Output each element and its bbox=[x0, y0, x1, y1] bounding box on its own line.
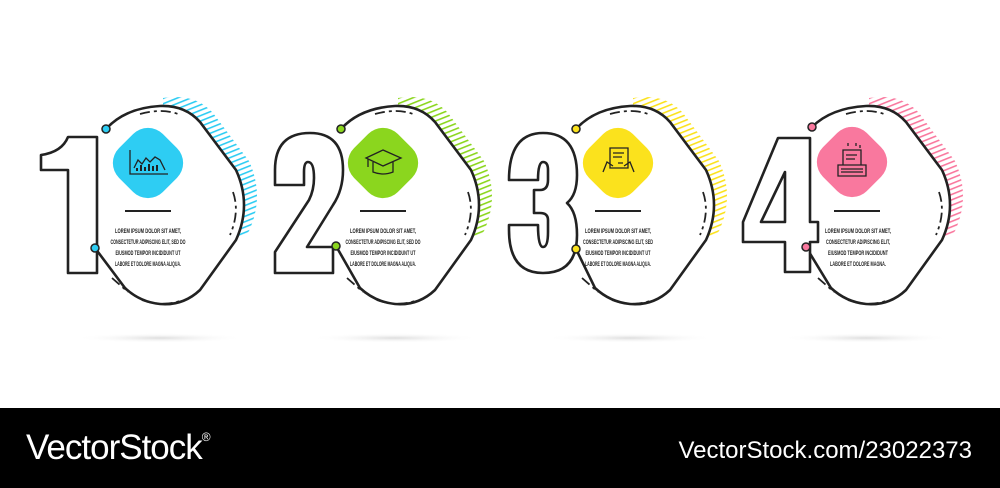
text block 1: LOREM IPSUM DOLOR SIT AMET, bbox=[115, 228, 181, 235]
text block 4: EIUSMOD TEMPOR INCIDIDUNT bbox=[828, 250, 888, 257]
text block 3: LABORE ET DOLORE MAGNA ALIQUA. bbox=[585, 261, 651, 268]
panel 3 bbox=[509, 97, 727, 343]
digit 1 bbox=[41, 137, 97, 273]
text block 1 bbox=[110, 228, 186, 268]
text block 2: LOREM IPSUM DOLOR SIT AMET, bbox=[350, 228, 416, 235]
icon: document in hands bbox=[574, 119, 662, 207]
panel 2 bbox=[275, 97, 492, 343]
text block 2 bbox=[346, 228, 421, 268]
text block 3 bbox=[583, 228, 653, 268]
text block 2: CONSECTETUR ADIPISCING ELIT, SED DO bbox=[346, 239, 421, 246]
text block 1: EIUSMOD TEMPOR INCIDIDUNT UT bbox=[116, 250, 181, 257]
text block 1: CONSECTETUR ADIPISCING ELIT, SED DO bbox=[110, 239, 186, 246]
digit 2 bbox=[275, 133, 343, 273]
panel 1 bbox=[41, 97, 257, 343]
footer bar bbox=[0, 408, 1000, 488]
text block 3: CONSECTETUR ADIPISCING ELIT, SED bbox=[583, 239, 653, 246]
footer url: VectorStock.com/23022373 bbox=[678, 437, 972, 464]
digit 3 bbox=[509, 133, 577, 273]
icon: graduation cap bbox=[339, 119, 427, 207]
text block 2: LABORE ET DOLORE MAGNA ALIQUA. bbox=[350, 261, 416, 268]
text block 4: LABORE ET DOLORE MAGNA. bbox=[830, 261, 886, 268]
digit 4 bbox=[743, 138, 818, 272]
icon: typewriter bbox=[808, 118, 896, 206]
text block 4: CONSECTETUR ADIPISCING ELIT, bbox=[826, 239, 890, 246]
panel 4 bbox=[743, 97, 963, 343]
text block 3: LOREM IPSUM DOLOR SIT AMET, bbox=[585, 228, 651, 235]
footer logo: ® bbox=[202, 430, 211, 444]
text block 2: EIUSMOD TEMPOR INCIDIDUNT UT bbox=[350, 250, 416, 257]
icon: chart bbox=[104, 119, 192, 207]
text block 1: LABORE ET DOLORE MAGNA ALIQUA. bbox=[115, 261, 181, 268]
footer logo: VectorStock bbox=[26, 428, 202, 467]
text block 3: EIUSMOD TEMPOR INCIDIDUNT UT bbox=[586, 250, 651, 257]
text block 4: LOREM IPSUM DOLOR SIT AMET, bbox=[825, 228, 891, 235]
text block 4 bbox=[825, 228, 891, 268]
